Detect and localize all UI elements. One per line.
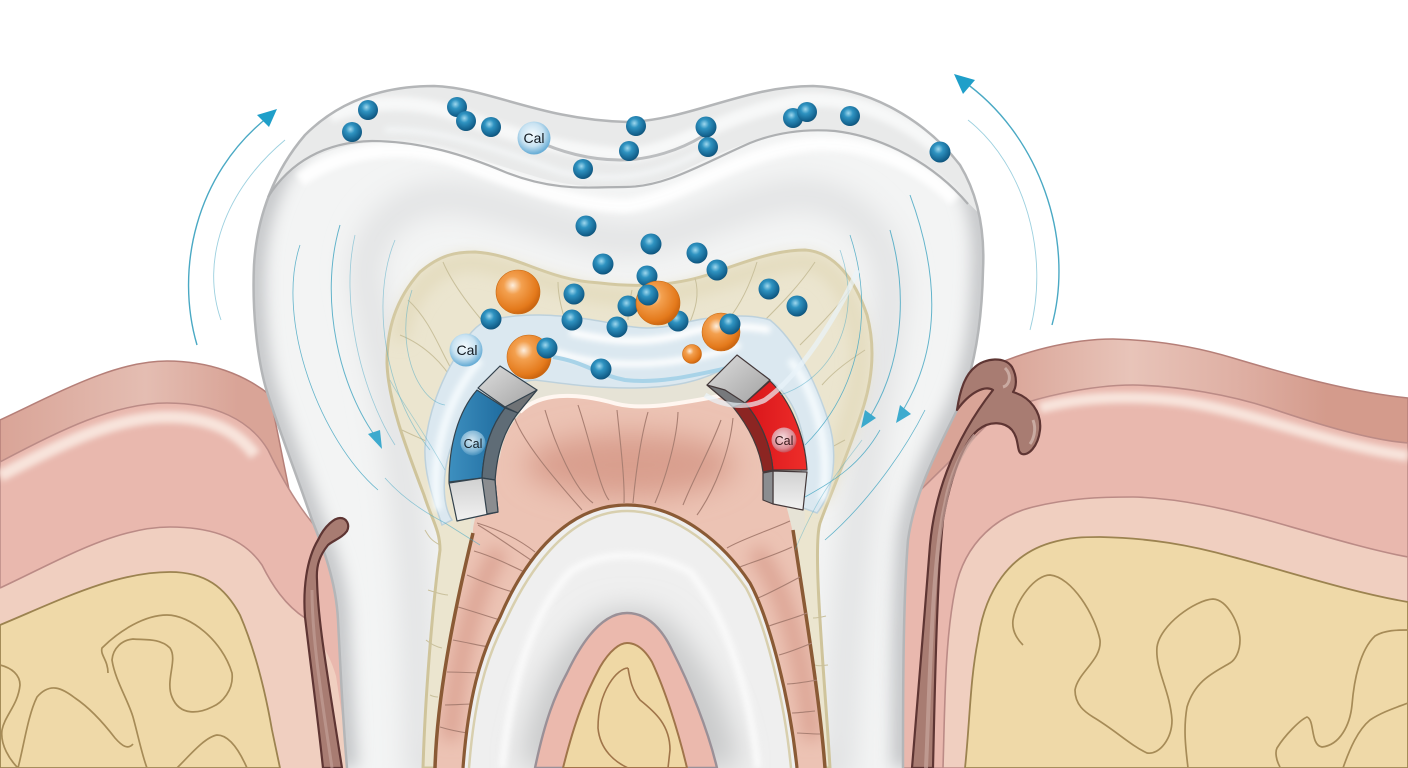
bone squiggles left bbox=[0, 615, 247, 768]
dentin tubule lines bbox=[400, 262, 865, 697]
spheres: blue bbox=[342, 97, 950, 380]
tooth body bbox=[240, 60, 990, 768]
inner pink root bbox=[535, 613, 717, 768]
inner bone bbox=[563, 643, 687, 768]
periodontal ligament right bbox=[912, 359, 1040, 768]
label: Cal on blue block: Cal bbox=[464, 437, 482, 451]
enamel top band bbox=[275, 88, 977, 212]
flow arrows bbox=[189, 74, 1059, 550]
pulp fibre lines bbox=[440, 405, 820, 734]
blue block left bbox=[449, 366, 537, 521]
bone squiggles right bbox=[1013, 575, 1408, 768]
enamel boundary line bbox=[268, 130, 968, 204]
spheres: blue behind orange bbox=[618, 266, 688, 332]
arrow: inner left bbox=[293, 225, 480, 545]
right gum bbox=[890, 339, 1408, 768]
label: Cal on red block: Cal bbox=[775, 434, 793, 448]
label: Cal on red block bbox=[772, 428, 796, 452]
arrow: upper left bbox=[189, 109, 285, 345]
label: Cal top bbox=[518, 122, 550, 154]
dentin bbox=[387, 250, 872, 768]
pulp shading bbox=[450, 433, 812, 740]
spheres: orange bbox=[496, 270, 702, 379]
translucent band bbox=[425, 315, 834, 525]
left gum bbox=[0, 361, 350, 768]
label: Cal left bbox=[450, 334, 482, 366]
periodontal ligament left bbox=[304, 518, 348, 768]
arrow: upper right bbox=[954, 74, 1059, 330]
root canal arch bbox=[463, 505, 797, 768]
glint streak bbox=[705, 270, 858, 405]
label: Cal on blue block bbox=[460, 430, 486, 456]
spheres: orange front bbox=[636, 281, 740, 351]
pulp tissue bbox=[435, 362, 825, 768]
label: Cal left: Cal bbox=[456, 342, 478, 358]
arrow: inner right bbox=[780, 195, 932, 550]
red block right bbox=[707, 355, 807, 510]
label: Cal top: Cal bbox=[523, 130, 545, 146]
